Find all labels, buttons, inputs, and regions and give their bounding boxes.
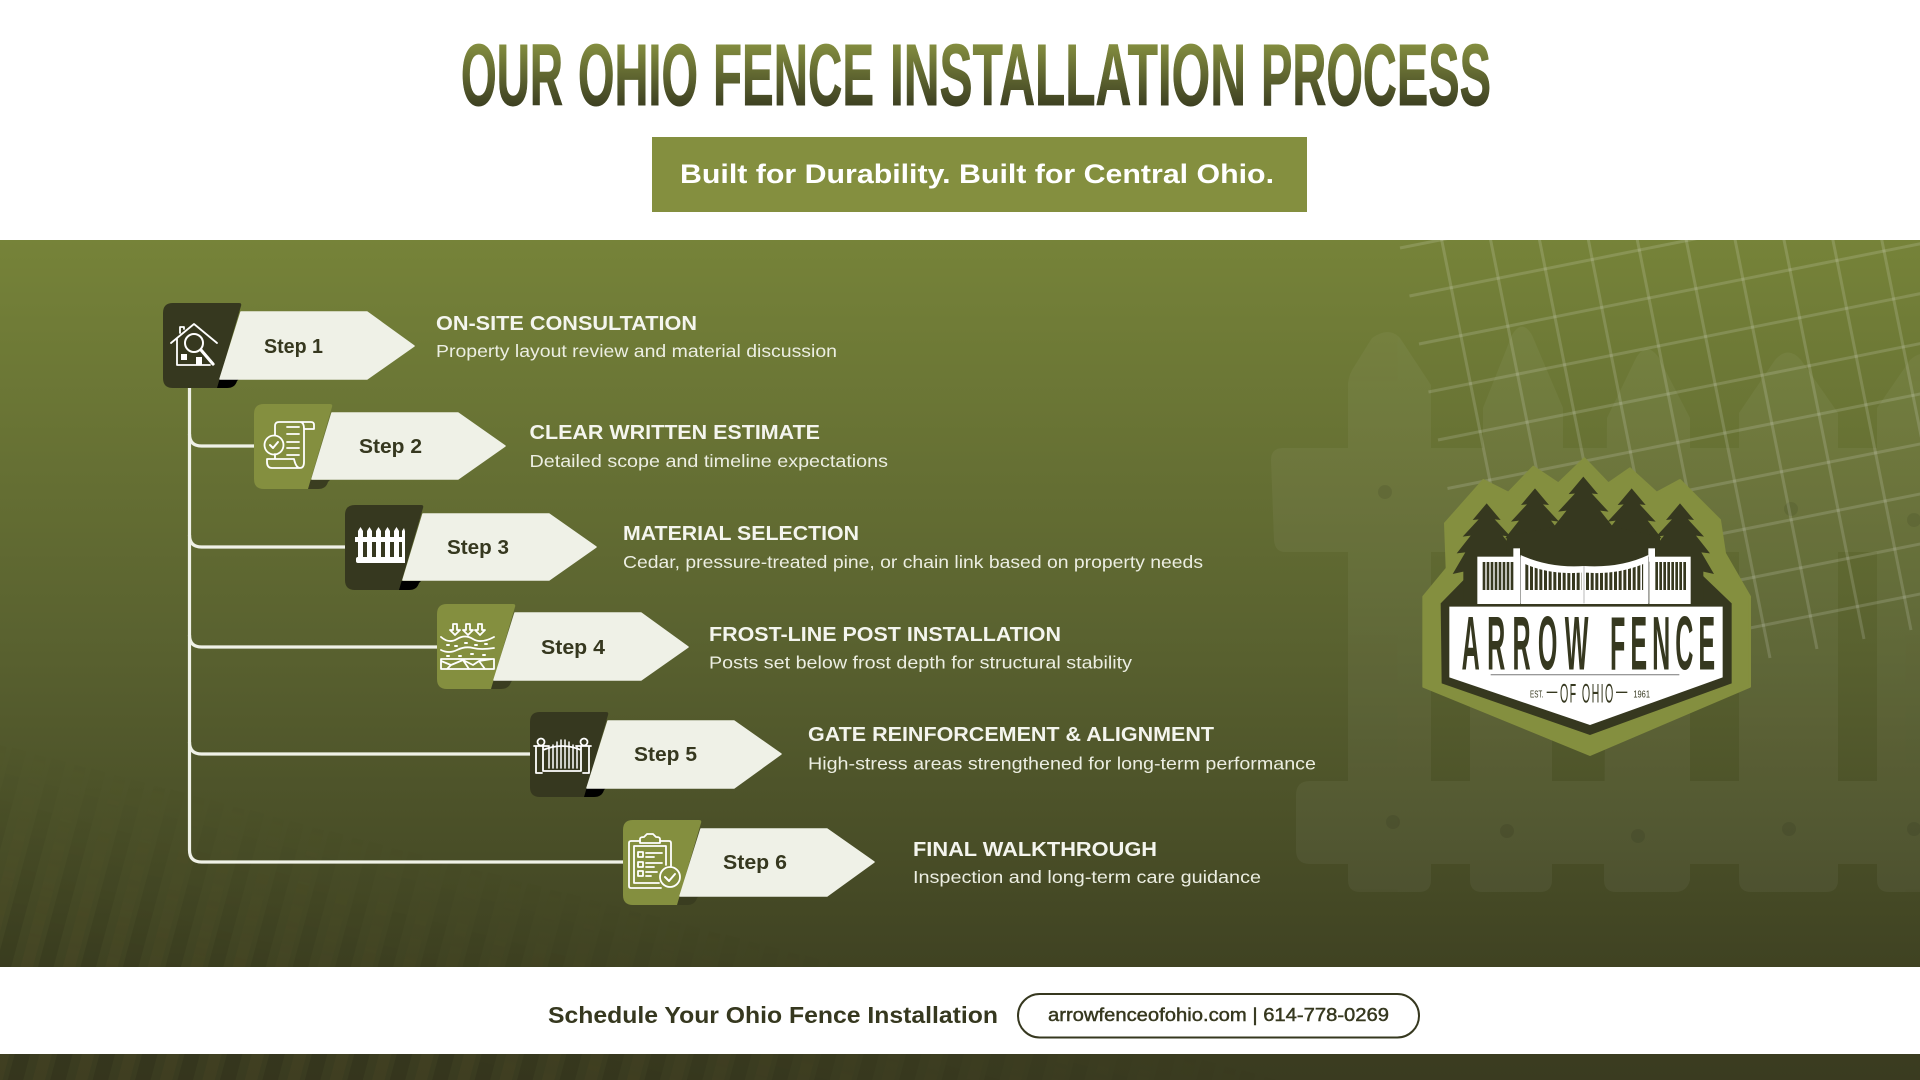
step 5 xyxy=(530,712,1316,797)
step 4 label: Step 4 xyxy=(541,637,606,659)
step 4 xyxy=(437,604,1132,689)
step 2 arrow xyxy=(312,413,505,479)
diagonal background stripes xyxy=(0,700,1920,1080)
icon: house with magnifier xyxy=(171,324,217,365)
step 4 arrow xyxy=(494,613,688,680)
logo: Arrow Fence of Ohio badge: 1961 xyxy=(1633,689,1650,700)
title: OUR xyxy=(461,27,563,124)
icon: frost line soil layers xyxy=(441,624,494,669)
logo: Arrow Fence of Ohio badge: OF OHIO xyxy=(1560,680,1613,709)
connector lines xyxy=(190,388,623,862)
step 4 heading: FROST-LINE POST INSTALLATION xyxy=(709,624,1061,646)
white header band xyxy=(0,0,1920,240)
step 1 description: Property layout review and material discussion xyxy=(436,341,837,361)
step 3 label: Step 3 xyxy=(447,537,509,559)
step 1 xyxy=(163,303,837,388)
step 3 xyxy=(345,505,1203,590)
step 2 label: Step 2 xyxy=(359,436,422,458)
step 6 label: Step 6 xyxy=(723,852,787,874)
title: OHIO xyxy=(578,27,698,124)
logo: Arrow Fence of Ohio badge: FENCE xyxy=(1610,601,1715,685)
step 6 description: Inspection and long-term care guidance xyxy=(913,867,1261,887)
step 3 arrow xyxy=(403,514,596,580)
contact pill: arrowfenceofohio.com | 614-778-0269 xyxy=(1048,1005,1389,1025)
title: INSTALLATION xyxy=(890,27,1246,124)
step 6 arrow xyxy=(680,829,874,896)
step 5 heading: GATE REINFORCEMENT & ALIGNMENT xyxy=(808,724,1214,746)
title: PROCESS xyxy=(1261,27,1491,124)
step 2 description: Detailed scope and timeline expectations xyxy=(530,451,888,471)
step 5 arrow xyxy=(587,721,781,788)
step 5 label: Step 5 xyxy=(634,744,697,766)
logo: Arrow Fence of Ohio badge xyxy=(1423,458,1750,755)
title: FENCE xyxy=(713,27,874,124)
step 1 arrow xyxy=(220,312,414,379)
logo: Arrow Fence of Ohio badge: ARROW xyxy=(1462,601,1589,685)
icon: picket fence xyxy=(355,527,405,563)
contact pill xyxy=(1018,994,1419,1038)
title xyxy=(461,27,1491,124)
footer call to action: Schedule Your Ohio Fence Installation xyxy=(548,1002,998,1028)
subtitle banner xyxy=(652,137,1307,212)
step 4 description: Posts set below frost depth for structural stability xyxy=(709,652,1132,672)
icon: written estimate scroll xyxy=(264,422,314,468)
step 1 label: Step 1 xyxy=(264,336,323,358)
step 1 heading: ON-SITE CONSULTATION xyxy=(436,313,697,335)
icon: reinforced gate xyxy=(534,738,591,773)
step 6 heading: FINAL WALKTHROUGH xyxy=(913,839,1157,861)
subtitle banner: Built for Durability. Built for Central Ohio. xyxy=(680,159,1274,189)
icon: inspection clipboard xyxy=(629,834,680,888)
step 3 description: Cedar, pressure-treated pine, or chain link based on property needs xyxy=(623,552,1203,572)
white footer band xyxy=(0,967,1920,1054)
background fence watermark xyxy=(1271,326,1920,892)
step 6 xyxy=(623,820,1261,905)
step 2 xyxy=(254,404,888,489)
step 5 description: High-stress areas strengthened for long-term performance xyxy=(808,754,1316,774)
background wire grid xyxy=(1400,240,1920,658)
step 3 heading: MATERIAL SELECTION xyxy=(623,523,859,545)
main green panel background xyxy=(0,240,1920,1080)
step 2 heading: CLEAR WRITTEN ESTIMATE xyxy=(530,422,820,444)
logo: Arrow Fence of Ohio badge: EST. xyxy=(1530,689,1543,700)
